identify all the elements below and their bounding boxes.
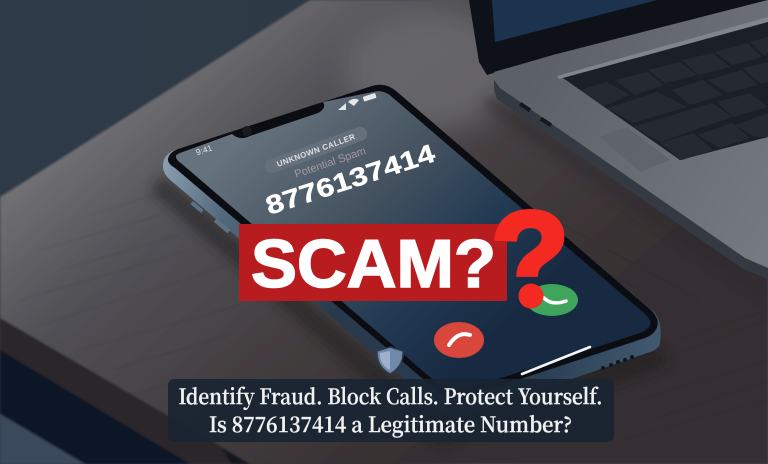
phone [150,85,668,445]
laptop base [494,0,768,268]
speaker holes [601,355,634,370]
caption: Identify Fraud. Block Calls. Protect Yourself. [178,381,602,411]
side buttons [190,201,230,233]
caller pill [263,125,369,175]
phone number: 8776137414 [262,138,439,221]
scam banner: SCAM? [251,226,496,302]
status icons [338,93,377,110]
laptop lid [469,0,768,75]
keyboard [563,22,768,160]
phone bezel [168,85,658,398]
decline button [434,322,484,358]
caller pill: UNKNOWN CALLER [276,132,357,169]
caption: Is 8776137414 a Legitimate Number? [209,409,572,439]
laptop [469,0,768,300]
phone frame [163,85,661,416]
phone front camera [242,126,252,136]
time: 9:41 [195,143,214,157]
red question mark [494,209,564,308]
laptop ports [519,102,552,127]
caption [168,379,614,442]
phone screen [176,91,650,391]
red question mark: ? [491,186,569,329]
shield icon [377,347,403,374]
laptop speaker grille [600,127,670,172]
laptop shadow [480,95,768,300]
accept button [526,284,578,316]
spam label: Potential Spam [293,145,368,181]
phone shadow [150,175,668,445]
home indicator [522,347,590,374]
